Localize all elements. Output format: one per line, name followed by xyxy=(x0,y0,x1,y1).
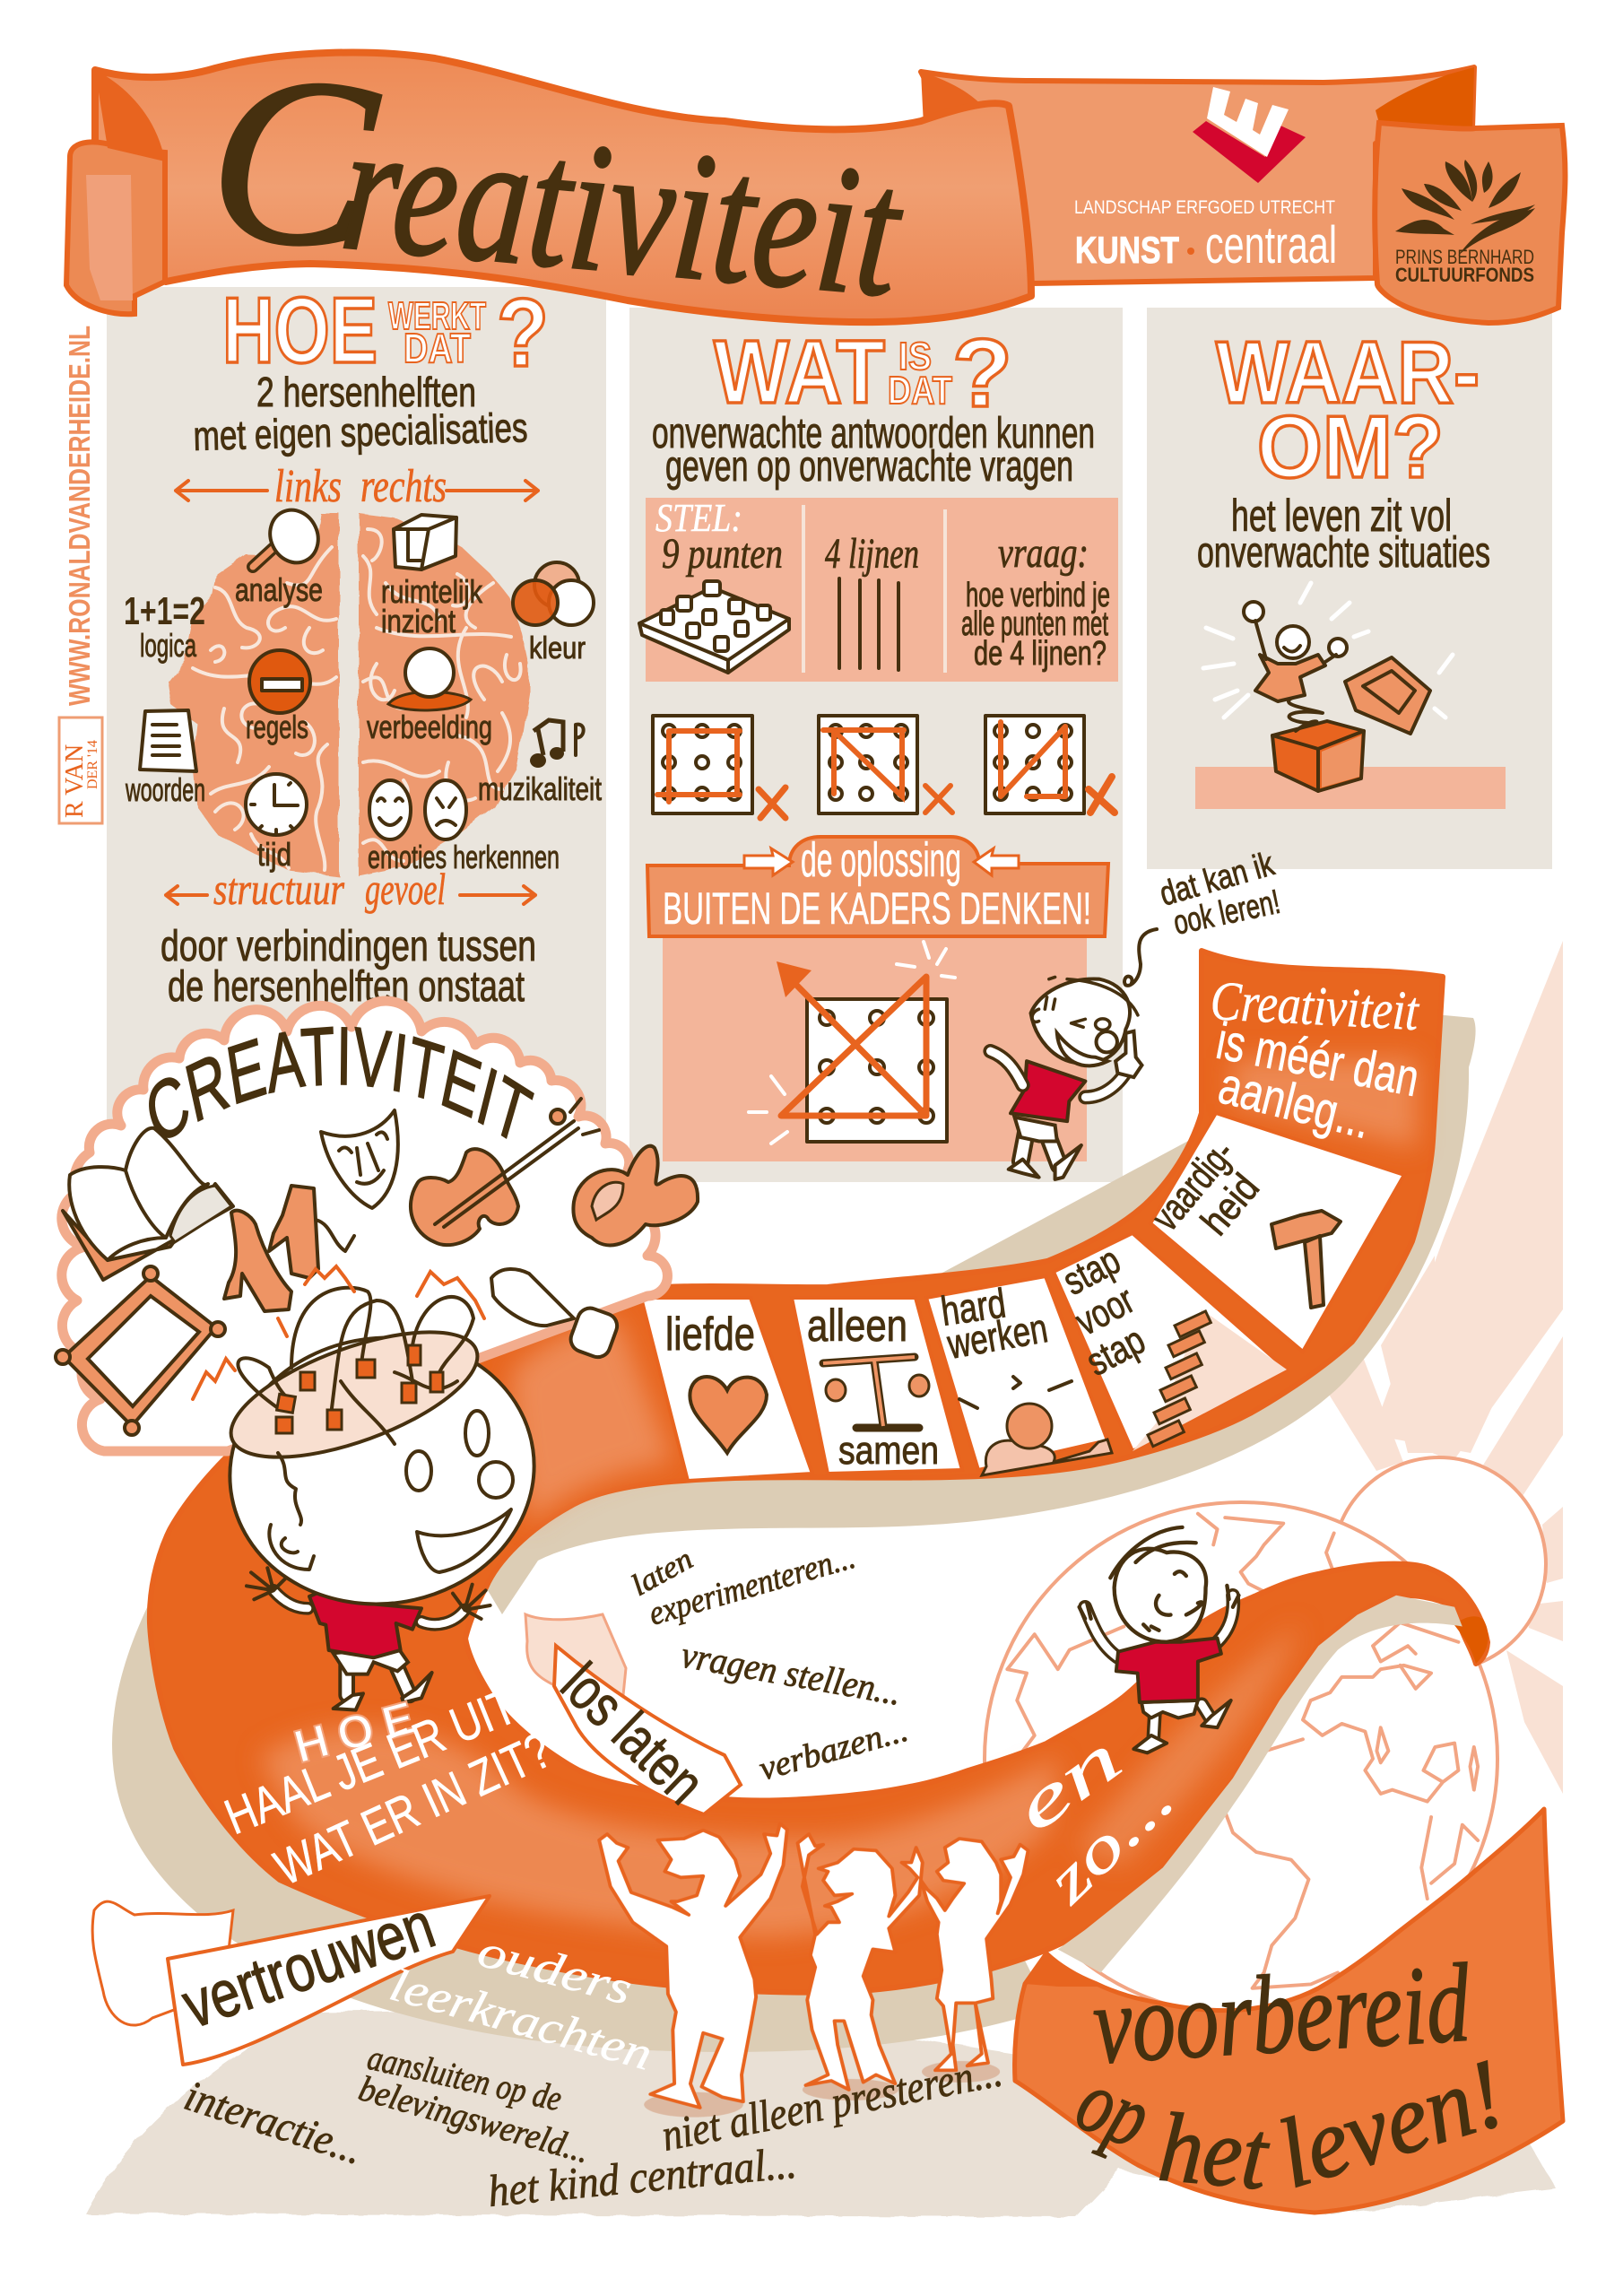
attempt 3 xyxy=(985,716,1115,813)
icon: wooden clogs xyxy=(573,1146,698,1245)
heading: wat is dat: WAT xyxy=(714,322,885,422)
ground labels: niet alleen presteren... xyxy=(657,2045,1006,2161)
inner curve text: vragen stellen... xyxy=(678,1635,904,1714)
card: hard werken xyxy=(926,1276,1112,1475)
cloud title curve text: CREATIVITEIT xyxy=(149,1026,534,1139)
structure feeling labels: gevoel xyxy=(365,864,446,914)
boy with idea xyxy=(991,845,1283,1179)
solution nine dots xyxy=(749,942,955,1144)
person two xyxy=(798,1834,923,2090)
voorbereid banner: op xyxy=(1064,2049,1164,2167)
text: specialisaties: met eigen specialisaties xyxy=(193,404,528,459)
person three xyxy=(921,1839,1028,2070)
en zo: en xyxy=(1001,1719,1135,1847)
ground labels: belevingswereld... xyxy=(355,2067,595,2170)
kunst: KUNST xyxy=(1075,229,1179,271)
globe and sun xyxy=(985,1457,1546,2015)
dat kan ik: dat kan ik xyxy=(1156,845,1279,914)
card: stap voor stap: stap xyxy=(1056,1239,1127,1304)
logo text: LANDSCHAP ERFGOED UTRECHT xyxy=(1074,197,1335,218)
dark right fold xyxy=(1376,67,1474,128)
question text: hoe verbind je xyxy=(966,577,1110,614)
voorbereid banner: voorbereid xyxy=(1089,1942,1473,2088)
banner text: creativiteit is meer dan aanleg: Creativiteit xyxy=(1209,970,1421,1042)
labels brain: logica xyxy=(140,627,197,664)
vertrouwen banner xyxy=(92,1887,490,2065)
big shadow lower xyxy=(112,1596,1049,2052)
lighter wash patches xyxy=(260,1058,1417,1937)
globe shadow under ribbon xyxy=(1058,1596,1462,1972)
globe boy xyxy=(1080,1527,1238,1752)
card: hard werken: hard xyxy=(938,1279,1009,1335)
labels brain: regels xyxy=(246,709,308,745)
three people xyxy=(599,1823,1028,2118)
icon: venn circles xyxy=(513,562,594,625)
icon: picture frame xyxy=(56,1266,225,1435)
prins bernhard: PRINS BERNHARD xyxy=(1395,246,1534,268)
ground labels: interactie... xyxy=(179,2072,369,2174)
text: onverwachte situaties: onverwachte situaties xyxy=(1197,529,1490,577)
vraag: vraag: xyxy=(998,529,1089,577)
card: liefde: liefde xyxy=(665,1309,755,1361)
icon: board with 9 pegs xyxy=(639,581,789,673)
face xyxy=(406,1451,431,1491)
attempts xyxy=(653,716,1115,818)
icon: sad face xyxy=(425,780,466,839)
text: geven op: geven op onverwachte vragen xyxy=(665,443,1073,491)
road text: hoe haal je eruit: WAT ER IN ZIT? xyxy=(266,1721,560,1896)
left right labels: links xyxy=(274,461,342,512)
ground labels: ouders xyxy=(473,1926,638,2015)
heading: hoe werkt dat xyxy=(222,278,549,387)
card: vaardigheid xyxy=(1143,1113,1404,1352)
boy figure xyxy=(991,977,1141,1179)
head xyxy=(213,1318,551,1623)
attempt 2 xyxy=(819,716,952,813)
vertrouwen banner: vertrouwen xyxy=(173,1887,443,2042)
road text: hoe haal je eruit xyxy=(217,1677,560,1896)
brain xyxy=(54,318,1566,2218)
icon: clock xyxy=(246,774,307,835)
card: stap voor stap: voor xyxy=(1069,1278,1141,1344)
icon: magnifier xyxy=(253,502,326,570)
road cards xyxy=(641,1113,1404,1481)
los laten banner xyxy=(525,1614,741,1816)
ground labels: aansluiten op de xyxy=(364,2037,566,2118)
question text: de 4 lijnen? xyxy=(974,635,1107,673)
card: alleen samen: samen xyxy=(838,1429,939,1473)
text: onverwachte antwoorden: onverwachte antwoorden kunnen xyxy=(652,410,1095,457)
icon: no entry xyxy=(249,650,310,713)
waarom heading: WAAR- xyxy=(1216,323,1480,422)
labels brain xyxy=(124,571,602,875)
brain in head xyxy=(216,1307,492,1483)
panel: wat is dat xyxy=(629,308,1123,1182)
buiten de kaders denken: BUITEN DE KADERS DENKEN! xyxy=(663,883,1091,934)
signature stamp: R VAN xyxy=(61,744,89,818)
voorbereid banner: het xyxy=(1155,2092,1273,2211)
speech tail xyxy=(1124,929,1157,986)
heading: hoe werkt dat: HOE xyxy=(222,279,378,383)
ground xyxy=(85,2009,1556,2217)
icon: cube xyxy=(394,515,456,570)
big head character xyxy=(193,1266,551,1710)
labels brain: inzicht xyxy=(381,603,456,639)
9 punten: 9 punten xyxy=(662,530,783,578)
stel: STEL: xyxy=(655,496,742,540)
structure feeling labels xyxy=(166,864,535,914)
heading: hoe werkt dat: ? xyxy=(497,278,549,387)
ground labels: leerkrachten xyxy=(385,1960,657,2081)
puzzle box xyxy=(639,496,1118,682)
creativity cloud xyxy=(56,996,673,1457)
heading: wat is dat: ? xyxy=(952,318,1012,427)
text: door verbindingen: door verbindingen tussen xyxy=(161,923,536,970)
en zo: zo... xyxy=(1033,1764,1188,1918)
jack in the box xyxy=(1195,583,1506,809)
logo: landschap erfgoed chevron xyxy=(1193,87,1306,183)
centraal: centraal xyxy=(1205,216,1337,274)
heading: wat is dat: DAT xyxy=(888,369,952,413)
road text: hoe haal je eruit: HOE xyxy=(289,1692,420,1774)
icon: document xyxy=(140,710,196,771)
cultuurfonds flag xyxy=(1375,123,1565,323)
cultuurfonds: CULTUURFONDS xyxy=(1395,264,1534,286)
text: 2 hersenhelften: 2 hersenhelften xyxy=(256,369,476,415)
spring xyxy=(1289,695,1323,731)
flower logo xyxy=(1395,160,1535,256)
en zo xyxy=(1001,1719,1188,1918)
solution banner xyxy=(647,833,1108,936)
box lid xyxy=(1345,657,1430,734)
de oplossing: de oplossing xyxy=(801,833,961,887)
panel: waarom xyxy=(1147,308,1552,869)
labels brain: muzikaliteit xyxy=(478,770,602,807)
labels brain: ruimtelijk xyxy=(381,573,483,610)
4 lijnen: 4 lijnen xyxy=(825,530,919,578)
text: de hersenhelften: de hersenhelften onstaat xyxy=(168,963,525,1011)
ground labels: het kind centraal... xyxy=(486,2137,799,2216)
jack figure xyxy=(1244,602,1347,701)
icon: joystick handle xyxy=(491,1269,621,1361)
inner curve text: experimenteren... xyxy=(645,1538,859,1633)
card: stap voor stap: stap xyxy=(1080,1318,1152,1385)
burst lines xyxy=(1203,583,1453,718)
waarom heading xyxy=(1216,323,1480,496)
signature stamp: DER '14 xyxy=(85,740,100,789)
question text: alle punten met xyxy=(961,605,1108,643)
card: alleen samen xyxy=(792,1298,962,1474)
big shadow upper xyxy=(448,1013,1476,1614)
inner curve text: verbazen... xyxy=(755,1711,912,1788)
icon: ballet shoes xyxy=(224,1186,354,1311)
labels brain: 1+1=2 xyxy=(124,589,205,633)
heading: wat is dat: IS xyxy=(898,335,932,378)
brain swirls xyxy=(193,529,521,870)
banner left roll xyxy=(66,142,165,314)
dark ribbon fold xyxy=(921,72,1004,152)
arrow right xyxy=(974,848,1019,875)
inner curve text xyxy=(626,1538,912,1788)
labels brain: verbeelding xyxy=(367,709,492,745)
card: liefde xyxy=(641,1298,812,1481)
los laten banner: los laten xyxy=(549,1650,717,1816)
icon: music notes xyxy=(530,720,584,768)
foot shadows xyxy=(644,2061,1000,2118)
heading: hoe werkt dat: WERKT xyxy=(388,294,486,338)
labels brain: woorden xyxy=(125,771,205,808)
heading: hoe werkt dat: DAT xyxy=(404,325,471,371)
card: stap voor stap xyxy=(1054,1233,1287,1451)
title: Creativiteit: Creativiteit xyxy=(200,21,915,348)
icon: four lines xyxy=(839,578,898,670)
box xyxy=(1272,721,1364,791)
continents xyxy=(1007,1514,1478,1988)
card: vaardigheid: heid xyxy=(1193,1166,1268,1243)
card: hard werken: werken xyxy=(943,1304,1051,1368)
panel: hoe werkt dat xyxy=(107,287,606,1139)
left right labels: rechts xyxy=(360,461,447,512)
banner text: creativiteit is meer dan aanleg: is méér dan xyxy=(1212,1012,1424,1108)
text: het leven zit vol: het leven zit vol xyxy=(1231,491,1452,541)
banner text: creativiteit is meer dan aanleg: aanleg... xyxy=(1213,1057,1376,1150)
question text xyxy=(961,577,1110,673)
structure feeling labels: structuur xyxy=(213,864,344,914)
ook leren: ook leren! xyxy=(1170,883,1283,943)
sparks xyxy=(193,1266,484,1399)
heading: wat is dat xyxy=(714,318,1012,427)
voorbereid banner xyxy=(1015,1809,1563,2213)
left right labels xyxy=(176,461,538,512)
arrow left xyxy=(744,848,793,875)
road text: hoe haal je eruit: HAAL JE ER UIT xyxy=(217,1677,524,1845)
ribbon end dark fold xyxy=(1454,1616,1488,1664)
card: alleen samen: alleen xyxy=(807,1300,907,1351)
solution picture background xyxy=(663,933,1087,1161)
icon: violin xyxy=(411,1099,599,1245)
signature stamp xyxy=(59,718,102,823)
icon: book xyxy=(63,1128,233,1280)
labels brain: analyse xyxy=(235,571,323,608)
icon: crystal ball xyxy=(388,648,471,710)
card: vaardigheid: vaardig- xyxy=(1143,1132,1244,1239)
waarom heading: OM? xyxy=(1257,397,1444,496)
labels brain: emoties herkennen xyxy=(368,839,560,875)
labels brain: kleur xyxy=(529,631,586,665)
logo ribbon xyxy=(921,67,1474,283)
voorbereid banner: leven! xyxy=(1265,2038,1516,2209)
ground labels xyxy=(179,1926,1006,2216)
sun rays background xyxy=(1324,941,1563,1794)
person one xyxy=(599,1823,787,2108)
banner text: creativiteit is meer dan aanleg xyxy=(1209,970,1424,1150)
labels brain: tijd xyxy=(257,836,291,873)
icon: theater mask xyxy=(321,1110,398,1208)
inner curve text: laten xyxy=(626,1543,699,1603)
title banner xyxy=(66,21,1031,348)
icon: happy face xyxy=(369,780,411,839)
attempt 1 xyxy=(653,716,785,818)
wires and electrodes xyxy=(238,1288,473,1408)
url vertical: WWW.RONALDVANDERHEIDE.NL xyxy=(63,326,96,706)
body xyxy=(247,1568,490,1710)
s-shaped orange road xyxy=(150,951,1488,1993)
